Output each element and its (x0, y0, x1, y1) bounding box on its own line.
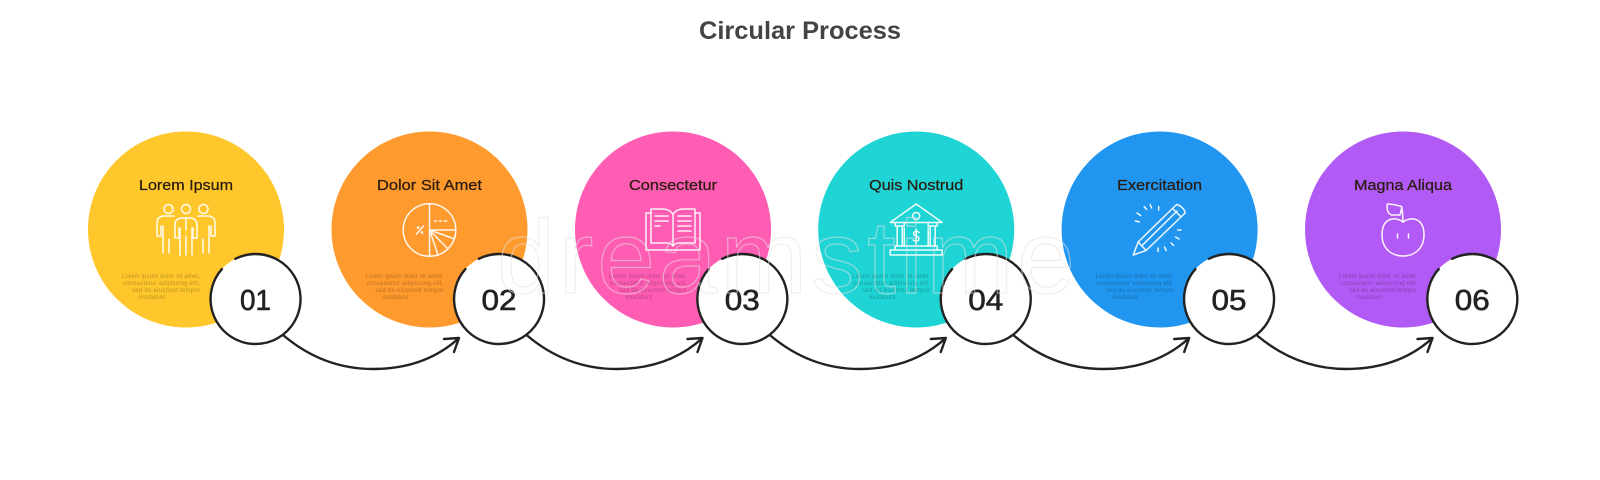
number badge 01 (210, 254, 301, 344)
text block: Lorem ipsum dolor sit amet, (1339, 274, 1417, 280)
arrow: 04 to 05 (1013, 335, 1189, 369)
heading: Exercitation: Exercitation (1117, 178, 1202, 194)
number badge 05 (1184, 254, 1274, 344)
arrow: 03 to 04 (770, 335, 946, 369)
number badge 03 (697, 254, 787, 344)
panel: step 1 Lorem Ipsum (88, 132, 284, 328)
text block: incididunt (139, 295, 165, 301)
icon: bank (890, 204, 942, 255)
heading: Dolor Sit Amet: Dolor Sit Amet (377, 178, 482, 194)
text block: incididunt (869, 295, 896, 301)
text block (366, 274, 444, 301)
text block: sed do eiusmod tempor (132, 288, 200, 294)
icon: apple (1382, 204, 1424, 256)
text block (609, 274, 687, 301)
panel: step 3 Consectetur (575, 132, 771, 328)
panel: step 4 Quis Nostrud (818, 132, 1014, 328)
number badge 02: 02 (482, 285, 516, 317)
text block: Lorem ipsum dolor sit amet, (366, 274, 444, 280)
text block: sed do eiusmod tempor (1106, 288, 1174, 294)
panel: step 6 Magna Aliqua (1305, 132, 1501, 328)
text block (1096, 274, 1174, 301)
text block (122, 274, 200, 301)
text block: incididunt (626, 295, 652, 301)
text block (1339, 274, 1417, 301)
text block: consectetur adipiscing elit, (1097, 281, 1174, 287)
text block: Lorem ipsum dolor sit amet, (122, 274, 200, 280)
heading: Lorem Ipsum: Lorem Ipsum (139, 178, 233, 194)
watermark: dreamstime (497, 200, 1075, 316)
arrow: 01 to 02 (283, 335, 459, 369)
title: Circular Process (699, 17, 901, 45)
number badge 06: 06 (1455, 285, 1490, 317)
text block: sed do eiusmod tempor (1349, 288, 1417, 294)
panel: step 2 Dolor Sit Amet (332, 132, 528, 328)
text block: consectetur adipiscing elit, (123, 281, 200, 287)
icon: pencil (1133, 204, 1185, 255)
heading: Magna Aliqua: Magna Aliqua (1354, 178, 1453, 194)
text block: sed do eiusmod tempor (619, 288, 687, 294)
text block (852, 274, 931, 301)
heading: Consectetur: Consectetur (629, 178, 717, 194)
text block: Lorem ipsum dolor sit amet, (1096, 274, 1174, 280)
number badge 05: 05 (1212, 285, 1246, 317)
icon: open book (646, 209, 700, 250)
text block: Lorem ipsum dolor sit amet, (609, 274, 687, 280)
text block: consectetur adipiscing elit, (366, 281, 444, 287)
text block: consectetur adipiscing elit, (1340, 281, 1417, 287)
arrow: 02 to 03 (526, 335, 702, 369)
icon: pie chart (403, 204, 456, 256)
number badge 04 (941, 254, 1031, 344)
number badge 01: 01 (240, 285, 271, 317)
number badge 04: 04 (968, 285, 1003, 317)
text block: incididunt (382, 295, 409, 301)
icon: people (157, 204, 215, 255)
text block: consectetur adipiscing elit, (610, 281, 687, 287)
heading: Quis Nostrud: Quis Nostrud (869, 178, 963, 194)
text block: sed do eiusmod tempor (862, 288, 930, 294)
panel: step 5 Exercitation (1062, 132, 1258, 328)
arrow: 05 to 06 (1256, 335, 1432, 369)
number badge 03: 03 (725, 285, 760, 317)
number badge 06 (1427, 254, 1517, 344)
text block: consectetur adipiscing elit, (853, 281, 931, 287)
text block: sed do eiusmod tempor (376, 288, 444, 294)
number badge 02 (454, 254, 544, 344)
text block: incididunt (1356, 295, 1382, 301)
text block: incididunt (1113, 295, 1139, 301)
text block: Lorem ipsum dolor sit amet, (852, 274, 931, 280)
